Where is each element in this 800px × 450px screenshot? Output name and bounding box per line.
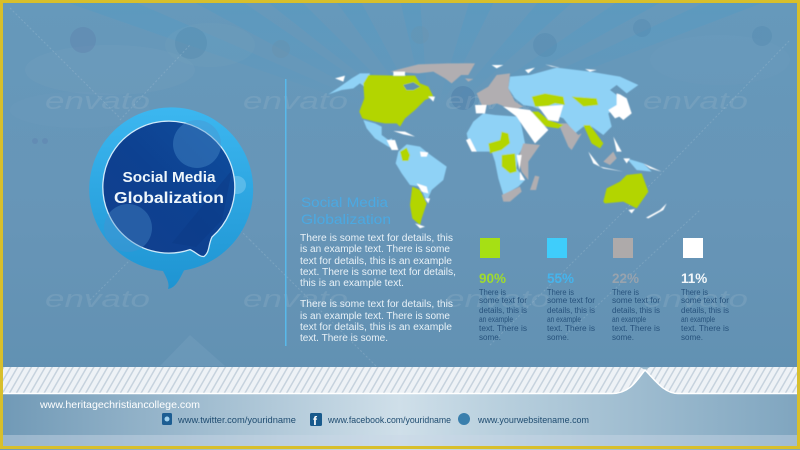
- legend: 22%: details, this is: [612, 306, 660, 315]
- legend: 55%: text. There is: [547, 324, 595, 333]
- legend: 22%: an example: [612, 315, 646, 324]
- icon: twitter: [162, 413, 172, 425]
- map: Americas: [328, 63, 472, 228]
- faint social icons: [32, 19, 772, 144]
- icon: globe: [458, 413, 470, 425]
- legend: 11%: some.: [681, 333, 703, 342]
- legend: 55%: details, this is: [547, 306, 595, 315]
- legend: 55%: [547, 238, 595, 342]
- legend: 90%: text. There is: [479, 324, 527, 333]
- legend: 22%: [612, 238, 660, 342]
- legend: 11%: There is: [681, 288, 708, 297]
- badge title: Social Media: [122, 170, 216, 186]
- footer: www.twitter.com/youridname: [177, 415, 296, 425]
- legend: 90%: details, this is: [479, 306, 527, 315]
- body text: [300, 233, 456, 344]
- stock watermarks: envato: [243, 88, 348, 115]
- body text: is an example text. There is some: [300, 311, 450, 322]
- legend: 90%: some text for: [479, 296, 527, 305]
- body text: text. There is some text for details,: [300, 267, 456, 278]
- hatched band: [0, 367, 800, 393]
- legend: 55%: 55%: [547, 271, 574, 286]
- legend: 11%: details, this is: [681, 306, 729, 315]
- vertical divider: [285, 79, 286, 346]
- stock watermarks: envato: [643, 286, 748, 313]
- map: Europe, Africa, Asia, Oceania: [460, 63, 667, 218]
- footer: [0, 367, 800, 450]
- body text: There is some text for details, this: [300, 299, 453, 310]
- legend: 90%: There is: [479, 288, 506, 297]
- body text: this is an example text.: [300, 278, 404, 289]
- legend: 22%: 22%: [612, 271, 639, 286]
- stock watermarks: envato: [643, 88, 748, 115]
- legend: 22%: There is: [612, 288, 639, 297]
- body text: There is some text for details, this: [300, 233, 453, 244]
- body text: text. There is some.: [300, 333, 388, 344]
- watermark url: www.heritagechristiancollege.com: [39, 400, 200, 411]
- stock watermarks: envato: [45, 286, 150, 313]
- legend: 90%: an example: [479, 315, 513, 324]
- inner disc: [103, 121, 235, 257]
- legend: 22%: some.: [612, 333, 634, 342]
- footer: www.facebook.com/youridname: [327, 415, 451, 425]
- body text: is an example text. There is some: [300, 244, 450, 255]
- legend: 90%: some.: [479, 333, 501, 342]
- body text: text for details, this is an example: [300, 256, 452, 267]
- icon: facebook: f: [313, 414, 318, 428]
- icon: facebook: [310, 413, 322, 428]
- legend: 11%: text. There is: [681, 324, 729, 333]
- speech bubble badge: [89, 107, 253, 289]
- footer: www.yourwebsitename.com: [477, 415, 589, 425]
- legend: 22%: some text for: [612, 296, 660, 305]
- legend: 55%: an example: [547, 315, 581, 324]
- section heading: Social Media: [301, 194, 388, 210]
- world map: [328, 63, 667, 228]
- legend: 11%: some text for: [681, 296, 729, 305]
- legend: 11%: [681, 238, 729, 342]
- section heading: [301, 194, 391, 227]
- stock watermarks: envato: [445, 286, 550, 313]
- body text: text for details, this is an example: [300, 322, 452, 333]
- stock watermarks: envato: [243, 286, 348, 313]
- legend: 55%: There is: [547, 288, 574, 297]
- legend: 22%: text. There is: [612, 324, 660, 333]
- legend: 90%: 90%: [479, 271, 506, 286]
- legend: 90%: [479, 238, 527, 342]
- legend: 11%: an example: [681, 315, 715, 324]
- legend: 11%: 11%: [681, 271, 707, 286]
- outer bubble: [89, 107, 253, 289]
- badge title: Globalization: [114, 190, 224, 207]
- section heading: Globalization: [301, 211, 391, 227]
- stock watermarks: [45, 88, 748, 313]
- legend: 55%: some.: [547, 333, 569, 342]
- stock watermarks: envato: [45, 88, 150, 115]
- stock watermarks: envato: [445, 88, 550, 115]
- legend: 55%: some text for: [547, 296, 595, 305]
- badge title: [114, 170, 224, 207]
